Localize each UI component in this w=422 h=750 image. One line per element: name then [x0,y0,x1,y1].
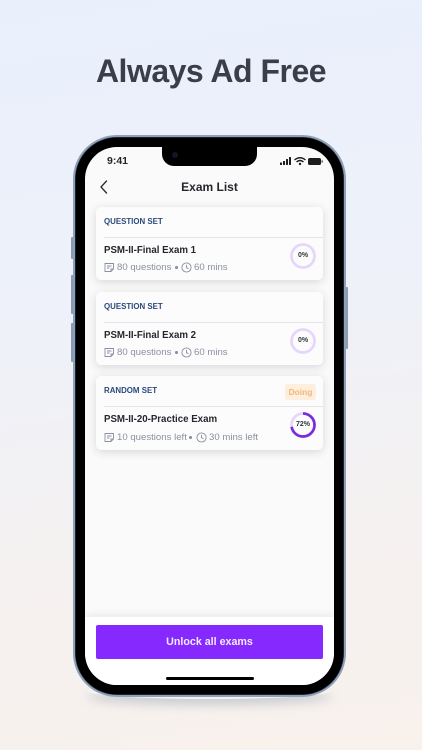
question count: 10 questions left [117,432,187,443]
phone [71,135,348,710]
status badge [285,384,316,400]
label: RANDOM SET [104,386,157,395]
phone frame [73,135,346,697]
phone shadow [87,683,332,699]
status badge: Doing [289,387,312,397]
bottom bar [85,617,334,685]
exam name: PSM-II-Final Exam 2 [104,330,196,341]
separator dot [189,436,192,438]
label: QUESTION SET [104,217,163,226]
home indicator [166,677,254,680]
screen heading: Exam List [181,180,238,194]
percent: 0% [298,337,308,344]
back arrow [100,180,108,194]
unlock button [96,625,323,659]
separator dot [175,266,178,268]
duration: 60 mins [194,262,228,273]
card: Final Exam 2 [96,292,323,365]
question count: 80 questions [117,347,171,358]
time left: 30 mins left [209,432,258,443]
progress ring [290,328,316,354]
separator dot [175,351,178,354]
title: Always Ad Free [96,53,326,89]
unlock button: Unlock all exams [166,636,253,648]
card: Practice Exam [96,376,323,450]
card: Final Exam 1 [96,207,323,280]
icon: notes [104,433,114,442]
side buttons [71,237,74,259]
screen [85,147,334,685]
icon: notes [104,348,114,357]
status time: 9:41 [107,155,128,167]
icon: clock [182,262,192,272]
duration: 60 mins [194,347,228,358]
progress ring [290,412,316,438]
icon: clock [196,432,206,442]
question count: 80 questions [117,262,171,273]
camera [172,152,178,158]
progress ring [290,243,316,269]
status icons [280,157,323,166]
percent: 72% [296,421,310,428]
exam name: PSM-II-Final Exam 1 [104,245,196,256]
label: QUESTION SET [104,302,163,311]
percent: 0% [298,252,308,259]
icon: clock [182,348,192,358]
exam name: PSM-II-20-Practice Exam [104,414,217,425]
notch [162,147,257,166]
icon: notes [104,263,114,272]
